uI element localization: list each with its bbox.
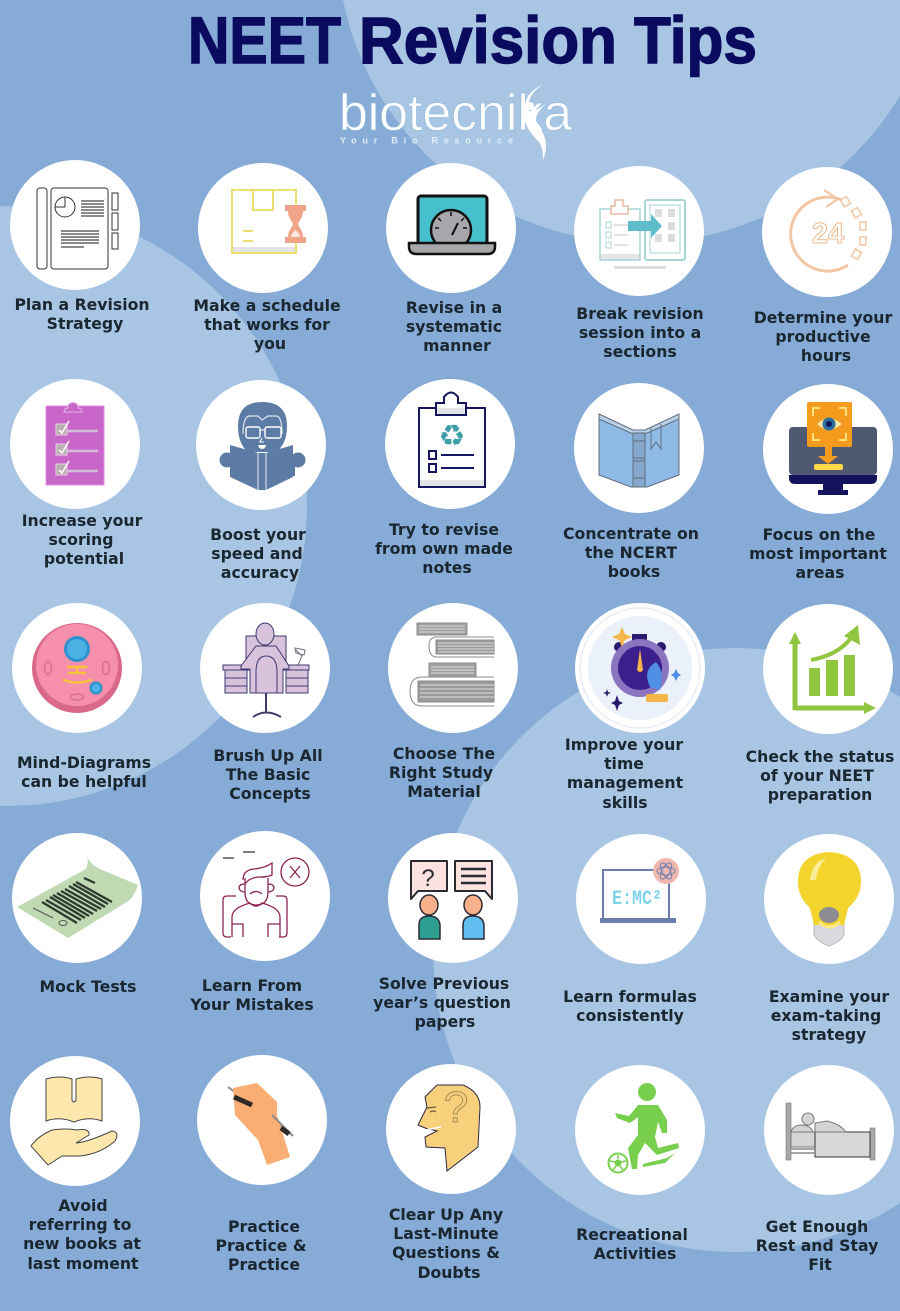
label: Plan a Revision	[14, 295, 150, 314]
icon: man reading	[196, 380, 326, 510]
label: Increase your	[22, 511, 143, 530]
label: Questions &	[392, 1243, 500, 1262]
tile: Choose The Right Study Material	[388, 603, 518, 801]
tile: Break revision session	[574, 166, 704, 361]
icon: worried student	[200, 831, 330, 961]
icon: clipboard with recycle: ♻	[439, 419, 465, 454]
label: Activities	[594, 1244, 676, 1263]
label: new books at	[23, 1234, 141, 1253]
icon: monitor with eye	[763, 384, 893, 514]
tile: Mock Tests	[12, 833, 142, 996]
title	[188, 3, 757, 77]
label: Determine your	[754, 308, 892, 327]
label: Check the status	[746, 747, 894, 766]
label: Brush Up All	[213, 746, 323, 765]
icon: stacked books	[388, 603, 518, 733]
label: systematic	[406, 317, 502, 336]
tile: Solve Previous year's question papers	[373, 833, 518, 1031]
icon: open blue book	[574, 383, 704, 513]
tile: Plan a Revision Strategy	[10, 160, 150, 333]
icon: formula laptop	[576, 834, 706, 964]
title: Revision	[359, 3, 617, 77]
icon: clipboard to phone	[574, 166, 704, 296]
label: notes	[422, 558, 472, 577]
icon: head with question mark: ?	[444, 1083, 468, 1132]
label: Right Study	[389, 763, 493, 782]
label: Your Mistakes	[189, 995, 314, 1014]
label: Avoid	[58, 1196, 108, 1215]
label: Strategy	[47, 314, 123, 333]
tile: Avoid referring to new books	[10, 1056, 141, 1273]
label: management	[567, 773, 684, 792]
label: areas	[796, 563, 844, 582]
label: papers	[415, 1012, 475, 1031]
label: Recreational	[576, 1225, 688, 1244]
tile: Recreational Activities	[575, 1065, 705, 1263]
tile: Practice Practice & Practice	[197, 1055, 327, 1274]
label: last moment	[27, 1254, 139, 1273]
label: Doubts	[417, 1263, 481, 1282]
label: Try to revise	[389, 520, 499, 539]
label: Material	[407, 782, 481, 801]
tile: Learn formulas consistently	[563, 834, 706, 1025]
label: Clear Up Any	[389, 1205, 503, 1224]
icon: footballer	[575, 1065, 705, 1195]
label: Boost your	[210, 525, 306, 544]
label: Last-Minute	[393, 1224, 499, 1243]
label: Focus on the	[763, 525, 875, 544]
icon: report document	[10, 160, 140, 290]
label: that works for	[204, 315, 330, 334]
icon: test paper	[12, 833, 142, 963]
icon: bed	[764, 1065, 894, 1195]
label: of your NEET	[760, 766, 874, 785]
label: preparation	[768, 785, 872, 804]
tile: Mind-Diagrams	[12, 603, 151, 791]
tile: Boost your speed and accuracy	[196, 380, 326, 582]
label: Practice	[228, 1217, 300, 1236]
label: Revise in a	[406, 298, 502, 317]
label: referring to	[29, 1215, 132, 1234]
tile: Increase your scoring potential	[10, 379, 143, 568]
label: Examine your	[769, 987, 889, 1006]
label: sections	[603, 342, 677, 361]
label: Choose The	[393, 744, 495, 763]
tile: Clear Up Any Last-Minute Questions	[386, 1064, 516, 1282]
icon: stopwatch	[575, 603, 705, 733]
label: accuracy	[221, 563, 299, 582]
tile: Concentrate on the NCERT books	[563, 383, 704, 581]
tile: Examine your exam-taking strategy	[764, 834, 894, 1044]
label: potential	[44, 549, 124, 568]
label: Mock Tests	[39, 977, 137, 996]
icon: growth chart	[763, 604, 893, 734]
label: the NCERT	[585, 543, 677, 562]
tile: Check the status	[746, 604, 894, 804]
tile: Try to revise from own made notes	[375, 379, 515, 577]
icon: 24 hour clock	[762, 167, 892, 297]
icon: head with question mark	[386, 1064, 516, 1194]
title: Tips	[634, 3, 757, 77]
icon: purple checklist	[10, 379, 140, 509]
label: Mind-Diagrams	[17, 753, 151, 772]
tile: Determine your productive hours	[754, 167, 892, 365]
label: scoring	[49, 530, 113, 549]
icon: two people with speech bubbles	[388, 833, 518, 963]
label: Improve your	[565, 735, 683, 754]
tile: Focus on the most important areas	[749, 384, 893, 582]
label: Concepts	[229, 784, 311, 803]
label: Make a schedule	[193, 296, 341, 315]
label: Concentrate on	[563, 524, 699, 543]
icon: cell diagram	[12, 603, 142, 733]
logo: biotecnika: biotecnika	[339, 84, 573, 141]
icon: light bulb	[764, 834, 894, 964]
tile: Learn From Your Mistakes	[189, 831, 330, 1014]
label: Rest and Stay	[756, 1236, 878, 1255]
label: most important	[749, 544, 887, 563]
label: Learn From	[202, 976, 302, 995]
label: speed and	[211, 544, 303, 563]
label: Get Enough	[766, 1217, 868, 1236]
tile: Improve your time management skills	[565, 603, 705, 812]
tile: Revise in a systematic manner	[386, 163, 516, 355]
label: exam-taking	[771, 1006, 881, 1025]
label: Practice	[228, 1255, 300, 1274]
icon: formula laptop: E:MC²	[612, 888, 662, 911]
label: productive	[775, 327, 871, 346]
label: can be helpful	[21, 772, 147, 791]
label: Learn formulas	[563, 987, 697, 1006]
label: from own made	[375, 539, 513, 558]
label: time	[604, 754, 644, 773]
label: strategy	[792, 1025, 866, 1044]
tile: Brush Up All The Basic Concepts	[200, 603, 330, 803]
label: you	[254, 334, 286, 353]
label: The Basic	[226, 765, 310, 784]
tile: Get Enough Rest and Stay Fit	[756, 1065, 894, 1274]
label: year’s question	[373, 993, 511, 1012]
label: session into a	[579, 323, 701, 342]
logo: biotecnika: Your Bio Resource	[340, 136, 513, 146]
icon: 24 hour clock: 24	[812, 218, 844, 250]
label: Fit	[808, 1255, 832, 1274]
label: Break revision	[576, 304, 704, 323]
icon: person at desk	[200, 603, 330, 733]
label: Solve Previous	[379, 974, 509, 993]
icon: hand holding book	[10, 1056, 140, 1186]
icon: box and hourglass	[198, 163, 328, 293]
label: consistently	[576, 1006, 684, 1025]
label: skills	[602, 793, 648, 812]
icon: hand writing	[197, 1055, 327, 1185]
label: books	[608, 562, 660, 581]
tile: Make a schedule	[193, 163, 341, 353]
label: Practice &	[215, 1236, 307, 1255]
label: manner	[423, 336, 491, 355]
title: NEET	[188, 3, 341, 77]
icon: laptop gauge	[386, 163, 516, 293]
icon: two people with speech bubbles: ?	[421, 865, 435, 892]
label: hours	[801, 346, 851, 365]
icon: clipboard with recycle	[385, 379, 515, 509]
